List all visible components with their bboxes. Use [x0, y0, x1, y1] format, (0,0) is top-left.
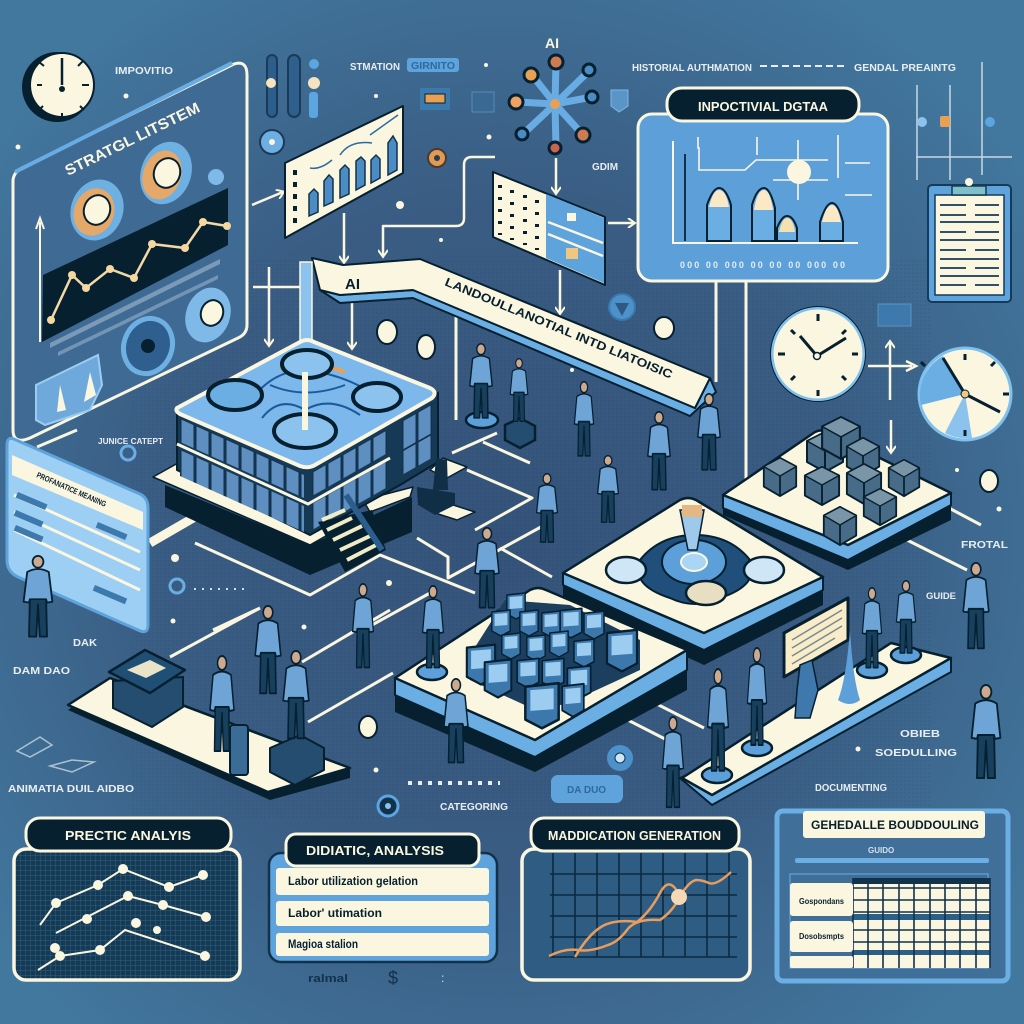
circuit lines	[698, 135, 872, 200]
chart axis	[36, 218, 44, 342]
roof	[176, 340, 435, 467]
small labels: FROTAL	[961, 540, 1008, 551]
small labels: GUIDE	[926, 591, 956, 601]
panel: medication generation	[522, 818, 750, 980]
line series	[38, 869, 206, 970]
line chart	[47, 218, 231, 324]
label: AI: AI	[545, 35, 559, 51]
blue bar	[795, 858, 989, 863]
icon: AI network	[509, 35, 598, 154]
label: historical automation: HISTORIAL AUTHMATION	[632, 63, 752, 74]
gauge ring 2	[132, 134, 200, 212]
platform: standing staff strip	[680, 598, 951, 805]
icon: blue disc	[607, 745, 633, 771]
banner AI label: AI	[345, 276, 360, 293]
bin	[230, 725, 248, 775]
small labels: OBIEB	[900, 729, 940, 740]
banner: AI pipeline	[300, 258, 716, 416]
small labels: DAK	[73, 638, 98, 649]
clock: pie timer	[919, 348, 1011, 440]
panel: schedule dashboard	[777, 811, 1008, 981]
clipboard	[928, 178, 1011, 302]
small labels: SOEDULLING	[875, 748, 957, 759]
header: MADDICATION GENERATION	[548, 828, 721, 843]
card: bar chart	[285, 106, 403, 238]
platform: data blocks	[395, 588, 687, 772]
header	[803, 811, 985, 838]
hub machine	[606, 505, 784, 605]
header: DIDIATIC, ANALYSIS	[306, 843, 444, 858]
footer note: :	[441, 971, 444, 985]
building: AI headquarters	[153, 340, 475, 575]
row 1	[276, 868, 489, 895]
header: PRECTIC ANALYIS	[65, 828, 191, 843]
bars	[707, 188, 843, 241]
banner tube	[300, 262, 312, 347]
panel: form list	[7, 438, 148, 632]
grid	[550, 853, 737, 957]
trend curves	[549, 872, 731, 957]
panel: strategy system dashboard	[13, 63, 247, 440]
table	[790, 874, 990, 968]
small labels: ANIMATIA DUIL AIDBO	[8, 784, 134, 795]
small labels: CATEGORING	[440, 802, 508, 813]
side terraces	[363, 458, 475, 520]
row 2: Labor' utimation	[288, 906, 382, 920]
roof swirl	[248, 370, 375, 418]
arrows	[252, 157, 891, 452]
axes	[673, 141, 858, 243]
icon: shield	[611, 90, 628, 112]
banner caption: LANDOULLANOTIAL INTD LIATOISIC	[443, 275, 675, 382]
gauge ring 4	[116, 311, 180, 381]
band	[177, 444, 390, 504]
cubes	[764, 417, 919, 545]
cone beacon	[838, 630, 860, 704]
clock: top left	[22, 52, 94, 122]
platform: processing hub	[563, 498, 823, 665]
badge: blue tag: GIRNITO	[411, 61, 455, 72]
badge: data: DA DUO	[567, 785, 606, 796]
dashed link	[760, 65, 845, 67]
header: GEHEDALLE BOUDDOULING	[811, 818, 979, 832]
row label 2: Dosobsmpts	[799, 932, 845, 941]
connector lines	[37, 282, 981, 740]
footer note: ralmal	[308, 973, 348, 985]
small device icons	[420, 88, 494, 112]
slider controls	[266, 55, 320, 118]
icon: gear	[428, 149, 446, 167]
badge icon	[260, 130, 284, 154]
highlight point	[671, 889, 687, 905]
icon: camera	[878, 304, 911, 326]
header	[286, 834, 479, 866]
walls	[177, 393, 438, 535]
arrow: clock to timer	[868, 361, 916, 371]
row 3	[276, 933, 489, 956]
sparkles	[16, 63, 1002, 772]
blocks	[467, 593, 640, 728]
small labels: DAM DAO	[13, 666, 70, 677]
platform: entry strip	[68, 650, 350, 800]
small labels: JUNICE CATEPT	[98, 437, 163, 446]
row label 3	[790, 956, 853, 968]
mini card	[36, 355, 102, 425]
small lock icon	[208, 169, 224, 185]
base terrace	[153, 463, 345, 545]
caption: GUIDO	[868, 846, 894, 855]
presenter	[795, 660, 818, 718]
presentation screen	[784, 598, 848, 677]
small labels	[8, 437, 1008, 813]
header	[26, 818, 231, 851]
panel: inferential data	[638, 88, 888, 281]
icon: swirl near form	[121, 446, 135, 460]
fountain	[302, 372, 308, 430]
footer note: $	[388, 968, 398, 988]
label: GDIM: GDIM	[592, 162, 618, 173]
panel title: STRATGL LITSTEM	[62, 99, 203, 180]
form fields	[14, 492, 127, 604]
data console	[109, 650, 185, 727]
panel: predictive analysis	[14, 818, 240, 980]
entrance figure	[417, 487, 455, 515]
dotted trail	[408, 781, 500, 785]
foot rings	[417, 412, 921, 783]
mini timeline diagram	[916, 62, 1012, 180]
ring icons	[359, 317, 998, 738]
people	[24, 344, 1000, 807]
row label 2	[790, 921, 853, 952]
panel: diagnostic analysis	[269, 834, 497, 962]
row 3: Magioa stalion	[288, 937, 358, 951]
card: table preview	[493, 172, 605, 285]
row label 1	[790, 883, 853, 916]
x labels: 000 00 000 00 00 00 000 00	[680, 260, 845, 270]
label: improvement: IMPOVITIO	[115, 66, 173, 77]
small network glyph	[17, 737, 94, 772]
base	[165, 485, 412, 575]
dark chart band	[42, 188, 228, 342]
label: general planning: GENDAL PREAINTG	[854, 63, 956, 74]
small labels: DOCUMENTING	[815, 783, 887, 794]
badge: data	[551, 775, 623, 803]
header pill	[667, 88, 859, 121]
clock: right face	[770, 306, 866, 402]
form heading: PROFANATICE MEANING	[35, 471, 108, 509]
highlight node	[787, 160, 811, 184]
pedestal	[270, 735, 324, 785]
icon: swirl with dots	[170, 579, 248, 593]
gauge ring 3	[178, 281, 238, 349]
gauge ring 1	[62, 172, 132, 248]
roof hubs	[208, 350, 401, 448]
platform: cube storage	[723, 417, 951, 570]
stairs	[318, 495, 386, 572]
badge: blue tag	[407, 58, 459, 72]
right windows	[312, 404, 432, 530]
icon: glowing gear	[378, 796, 398, 816]
header	[531, 818, 739, 851]
row 2	[276, 901, 489, 926]
left windows	[180, 418, 304, 532]
icon: speech ring	[609, 294, 635, 320]
row label 1: Gospondans	[799, 897, 845, 906]
footer note	[308, 968, 444, 988]
label: strategy: STMATION	[350, 62, 400, 73]
row 1: Labor utilization gelation	[288, 874, 418, 888]
header pill: INPOCTIVIAL DGTAA	[698, 99, 829, 114]
small text rows	[50, 259, 220, 356]
